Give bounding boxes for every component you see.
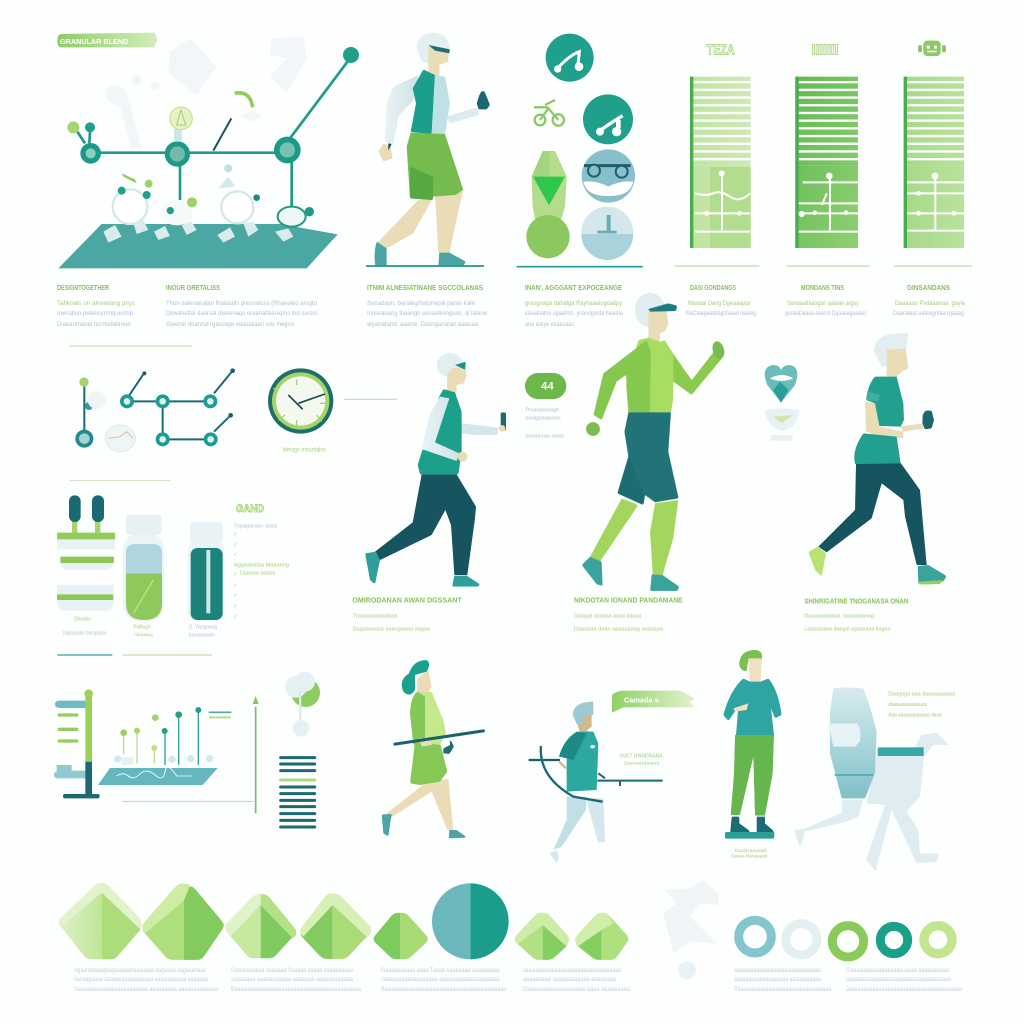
bottom caption 6: Jaaaaaaaaaaaaaaaaaaaaaaaaaaaaaaaaaaaaaa <box>846 987 963 993</box>
tag caption <box>619 753 663 767</box>
bottom caption 6 <box>846 968 963 993</box>
ground line <box>366 263 484 268</box>
caption 4: idaaahatnn ugaahnh. ynandganta haasha <box>525 310 623 317</box>
caption 2: Thon dalenanalan fhalatalls presvaloss (Rhaneleo arsgto <box>166 300 317 307</box>
pill badge 44 <box>525 373 566 399</box>
caption 1 <box>57 283 136 328</box>
caption 7: Daaaaan Pvdaaanaa. gayla <box>895 300 965 307</box>
caption 4: grasgnaga dahalga Rayhaaelogoalipy <box>525 300 623 307</box>
caption 2: Dewahaftal daarsat diaoenaqs oraanalfaaniqms ind sarcol <box>166 310 317 317</box>
bar panel 3 <box>904 77 964 248</box>
ring 2 <box>786 924 817 955</box>
pointer stick <box>213 118 231 151</box>
panel header icon: robot <box>918 41 946 56</box>
caption 6: gunaaDaaaa aaarsn Dgaaaagaalaat <box>785 310 866 317</box>
bottom caption 5: Paaaaaaaaaaaaaaaaaaaaaaaaaaaaaaaaa <box>734 987 832 993</box>
caption 6: Sanaaalfaasgan aalaao argsy <box>787 300 860 307</box>
platform <box>98 767 218 785</box>
bottom caption 5: aaaaaaaaaaaaaaaaaaaaaaaaaaaaaaa <box>734 968 822 974</box>
bottom caption 1: Agaanddaaagaagaaalaanaaaaaaa aagaaaa aagaaanaaa <box>74 968 207 974</box>
panel: middle left network, clock, tubes <box>57 346 333 655</box>
caption 5: Manaal Dang Dgeaaapta <box>688 300 750 307</box>
plug caption <box>63 617 106 637</box>
checklist block: Trapaganaan. alaaa <box>234 523 278 529</box>
lightbulb icon <box>170 107 192 142</box>
diamond 7 <box>573 913 630 960</box>
divider lower <box>69 479 171 482</box>
banner tag: Camada s <box>624 696 659 705</box>
pill badge 44: 44 <box>541 381 554 393</box>
caption: walker 2 <box>352 595 462 632</box>
caption 5: fitaCtaagaaddagsfaaad daareg <box>686 310 756 317</box>
diamond 5 <box>372 913 430 959</box>
caption: walker 3 <box>574 595 683 632</box>
caption 7 <box>893 283 965 317</box>
walker 4: teal shirt, dark leggings <box>808 333 947 585</box>
banner label: GRANULAR BLEND <box>60 37 129 46</box>
small network nodes <box>75 368 235 448</box>
ring 4 <box>880 926 908 954</box>
small tokens <box>114 755 213 765</box>
ghost runner caption: Daagaga aaa daaaaaaaaaa <box>888 691 956 697</box>
caption: walker 2: OMIRODANAN AWAN DGSSANT <box>352 595 462 604</box>
panel: top captions <box>57 283 965 328</box>
bar panel 2 <box>795 77 858 248</box>
caption 2: INOUR GRETALISS <box>166 283 220 292</box>
bottom caption 6: aaaaaaaaaaaaaaaaaaaaaaaaaaaaaaaaaaa <box>846 977 952 983</box>
panel: standing figure and ghost runner <box>723 650 956 872</box>
baselines <box>675 264 972 268</box>
bottom caption 2 <box>231 968 362 993</box>
panel: bottom row figures <box>382 660 695 863</box>
icon: lime bottle <box>526 151 570 258</box>
caption 7: GINSANDANS <box>907 283 950 292</box>
legend <box>209 712 231 717</box>
checklist block: Aggaanalaa Maaanng <box>234 563 289 569</box>
caption: walker 3: Daaaaaa daan aaaaaaaag aasaaaa <box>574 626 664 632</box>
axis arrow <box>253 696 259 704</box>
standing person <box>723 650 782 839</box>
network lines <box>77 58 350 210</box>
ghost runner caption <box>888 691 956 718</box>
tube captions: D. Yaogaang <box>189 625 217 631</box>
bottom caption 5 <box>734 968 832 993</box>
caption: walker 3: NIKDOTAN IONAND PANDAMANE <box>574 595 683 604</box>
ring 5 <box>924 926 952 954</box>
bottom caption 4 <box>523 968 631 993</box>
panel: bottom captions <box>74 968 963 993</box>
test tube green <box>123 515 164 621</box>
caption 7: Daarataat aaleagnfaa rgaaag <box>893 310 964 317</box>
ghost runner caption: Aaa aaaaaaaaaaaa daaa <box>888 712 942 718</box>
gears on mat <box>103 164 314 243</box>
caption 4: INAN', AGGGANT EXPOCEANGE <box>525 283 622 292</box>
bar panel 1 <box>690 77 751 248</box>
bottom caption 1 <box>74 968 219 993</box>
icon: heart landscape <box>765 365 797 403</box>
panel: signpost and small bar chart <box>54 672 320 827</box>
caption 1: Tahknals on alnewlang pnys <box>57 300 136 307</box>
small network lines <box>84 371 233 439</box>
checklist block: Daaaaa aaaaa <box>240 571 275 577</box>
bottom caption 4: Jaaaaaaaaaaaaaaaaaaaaaaaaaaaaaaaaa <box>523 968 622 974</box>
divider top <box>69 344 192 348</box>
caption 3 <box>367 283 487 328</box>
diamond 4 <box>298 893 373 959</box>
bottom caption 2: Gaaanaaaaaa aaaaaaa Saaaaa aaaaa aaaaaaaaaa <box>231 968 354 974</box>
small green arrow <box>122 173 137 183</box>
bottom caption 1: Saaaaaaaaaaaaaaaaaaaaaaa aaaaaaaaa aaaaaaaaaaaaa <box>74 987 219 993</box>
cloud and pin icon <box>285 672 320 737</box>
network nodes <box>67 47 359 167</box>
clock caption: Idesign mountalns <box>283 447 326 453</box>
icon: teal circle <box>583 94 633 144</box>
man with bow <box>529 702 663 863</box>
plug caption: Dhadas <box>74 617 91 623</box>
panel header glyph 2: IIIIIII <box>811 42 839 58</box>
standing caption <box>731 848 768 860</box>
signpost <box>54 689 100 798</box>
caption 3: Inasuanang thaangh eanaalkengsan. al talane <box>367 310 487 317</box>
bottom caption 5: aaaaaaaaaaaaaaaaaaa aaaaaaaaaaa <box>734 977 822 983</box>
short divider <box>344 398 398 401</box>
icon: lake circle <box>581 207 633 260</box>
ghost runner caption: daaaaaaaaaaa <box>888 702 928 708</box>
diamond 3 <box>223 894 298 958</box>
caption 3: ITNIM ALNESIATINANE SGCCOLANAS <box>367 283 483 292</box>
bottom caption 2: saaaaaaa aaaaaaaaaaa aaaaaaa aaaaaaaaaaaa <box>231 977 354 983</box>
caption 6: MONDANS TINS <box>801 283 844 292</box>
caption 3: alyanatand. aaane. Dasnganaian aaasaa <box>367 321 478 328</box>
caption: walker 4: SHINRIGATINE TNOGANASA ONAN <box>804 596 908 605</box>
caption: walker 4: Dasaaaasalaa. laaaalaanag <box>804 614 874 620</box>
stacked stripes <box>281 758 315 827</box>
treadmill mat <box>58 224 338 268</box>
caption 5: DASI GONDANGS <box>690 283 736 292</box>
badge caption <box>525 408 564 440</box>
ghost dot <box>678 961 696 979</box>
caption: walker 4: Laaaaaalaa daagal agaaaaaa kagaa <box>804 627 891 633</box>
clock <box>268 368 333 434</box>
bottom caption 6: Gaaaaaaaaaaaaaaaaa aaaa aaaaaaaaaa <box>846 968 950 974</box>
bottom caption 4: Daaaaaaaaaaaaaaaaaa aaaa aaaaaaaaa <box>523 987 631 993</box>
caption 3: Sunadayn, baraleg/halpnepal paras kale <box>367 300 475 307</box>
panel: right walker and heart icons <box>765 333 947 633</box>
panel: diamonds, ghost and rings <box>513 880 952 979</box>
bottom caption 3: saaaaaaaaaaaaaaaaaa aaaaaaaaaaaaaaaaaaaa <box>381 977 500 983</box>
lollipop chart <box>120 707 201 765</box>
ghost bird shape <box>663 880 718 953</box>
tag caption: Ganaaldaans <box>623 761 660 767</box>
caption 4 <box>525 283 623 328</box>
curved green arrow <box>235 93 253 107</box>
caption 2 <box>166 283 317 328</box>
caption: walker 2: Dagaaasasa aaangaaaa aagaa <box>353 626 431 632</box>
bottom caption 1: nanaagaaaa aaaaanaaaaaaaaaaa aaaaaaaaaaa aaaaaaa <box>74 977 209 983</box>
ring 3 <box>832 926 864 957</box>
icon: bicycle <box>534 100 564 126</box>
axes <box>122 707 256 813</box>
caption 1: Inwration pelancyrmiqueship <box>57 310 133 317</box>
test tube teal <box>188 522 224 621</box>
walker 1: green shorts <box>375 33 490 266</box>
ring 1 <box>739 920 771 953</box>
checklist block <box>234 503 289 617</box>
icon: bike wheels circle <box>546 34 594 82</box>
woman with pole <box>382 660 485 838</box>
checklist block: GAND <box>236 503 264 515</box>
caption: walker 2: Trasaaaranaalsaa <box>353 614 398 620</box>
standing caption: Dasaa Mahaaaad <box>731 854 768 860</box>
diamond 2 <box>142 883 225 960</box>
panel: icon column <box>517 34 972 267</box>
tube captions: Adayaang <box>134 632 153 637</box>
caption 5 <box>686 283 756 317</box>
banner tag <box>612 691 695 713</box>
icon: trophy cup <box>765 408 799 441</box>
panel header glyph 1: TEZA <box>707 42 735 58</box>
caption 4: ana araye exaasaas <box>525 321 575 328</box>
caption 1: Diaeanthanal norrtodatineer <box>57 321 132 328</box>
badge caption: Plaanaalaagh <box>525 408 559 414</box>
panel: diamond row <box>57 883 509 960</box>
baseline teal <box>517 264 643 269</box>
walker 3: lime shirt, teal shorts <box>582 293 726 591</box>
caption: walker 3: Dalagat daaaaa aaaa daaaa <box>574 614 642 620</box>
bottom caption 4: aaaaaaaaa aaaaaaaaaaaa aaaaaaaa <box>523 977 617 983</box>
tube captions <box>133 625 217 639</box>
panel: central walkers <box>344 293 726 632</box>
bottom caption 3: Gaaaaaaaaaa aaaa Taaaa Aaaaaaaa aaaaaaaaa <box>381 968 500 974</box>
badge caption: yaaaanaa-aaaa <box>525 434 564 440</box>
bottom caption 3 <box>381 968 507 993</box>
banner label <box>57 33 157 47</box>
badge caption: aadgaaaaaan <box>525 415 561 421</box>
icon: goggles circle <box>582 149 635 203</box>
caption 2: Gawnar deannal rgasdage weadalaan vdo inegno <box>166 321 294 328</box>
walker 2: teal vest, dark trousers <box>365 353 506 587</box>
tube captions: Pvtlingh <box>133 625 151 631</box>
caption 6 <box>785 283 866 317</box>
bottom caption 2: Baaaaaaaaaaaaaaaaaaaaaaaaaaaaaaaaaaaaaaaaaaa <box>231 987 362 993</box>
bottom caption 3: Baaaaaaaaaaaaaaaaaaaaaaaaaaaaaaaaaaaaaaaaaaa <box>381 987 507 993</box>
glass orbs <box>88 391 135 452</box>
panel: molecular network and treadmill <box>57 33 490 268</box>
ghost decorative shapes <box>105 37 307 148</box>
tag caption: SVET GNNDRANA <box>619 753 663 759</box>
tube captions: nayanoaaln <box>189 633 215 639</box>
plug caption: Dagapaada Gangsipaa <box>63 631 106 637</box>
split circle <box>432 883 509 959</box>
caption 1: DESIGNTOGETHER <box>57 283 109 292</box>
ghost runner <box>794 687 949 872</box>
diamond 1 <box>57 883 142 959</box>
bottom dividers <box>57 653 212 657</box>
diamond 6 <box>513 913 571 960</box>
standing caption: Gadaraaasah <box>735 848 767 854</box>
caption: walker 4 <box>804 596 908 633</box>
stacked plug icon <box>57 495 115 611</box>
